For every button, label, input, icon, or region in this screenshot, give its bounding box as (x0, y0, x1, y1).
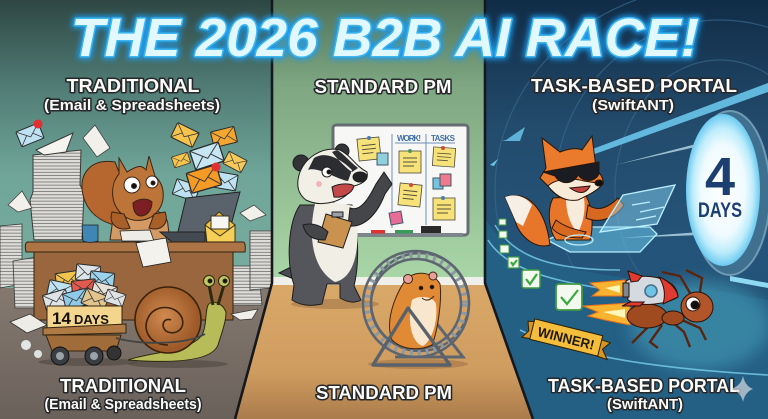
portal with day count (686, 111, 768, 275)
title: THE 2026 B2B AI RACE! (71, 8, 699, 68)
badger body (289, 205, 361, 305)
badger eyes (322, 167, 332, 177)
snail shell (135, 287, 201, 353)
badger head (298, 149, 367, 204)
whiteboard column headings: WORK! (397, 134, 421, 143)
badger arm pointing (348, 172, 392, 226)
heading: task-based portal top: (SwiftANT) (592, 97, 674, 114)
whiteboard column headings (397, 134, 456, 143)
badger tail (279, 265, 296, 280)
icon: sparkle (731, 376, 753, 402)
fox body (549, 196, 592, 240)
snail eye stalks (204, 276, 230, 305)
heading: traditional top: (Email & Spreadsheets) (44, 97, 220, 114)
heading: traditional bottom: TRADITIONAL (60, 376, 186, 396)
squirrel eyes (124, 176, 158, 193)
hamster wheel stand (373, 308, 450, 365)
paper stacks: background (0, 224, 272, 308)
icon: envelope cart (21, 264, 138, 366)
icon: stray paper on floor (10, 314, 47, 333)
icon: paper stack on desk (30, 133, 84, 240)
fox head (540, 136, 603, 200)
ant head (681, 292, 713, 322)
whiteboard (333, 125, 468, 237)
desk (25, 242, 245, 320)
icon: blue mug (82, 225, 98, 242)
ant with rocket (622, 270, 713, 348)
portal with day count: DAYS (698, 199, 742, 222)
badger belly (312, 200, 358, 282)
wall: standard PM (272, 0, 485, 278)
hologram laptop (565, 185, 675, 245)
icon: envelopes (16, 120, 247, 201)
fox (505, 136, 624, 246)
wall: traditional (0, 0, 272, 419)
floor: traditional (0, 288, 272, 419)
cart box with day count: 14 (52, 309, 71, 328)
heading: traditional bottom (44, 376, 202, 413)
sticky notes (357, 136, 456, 225)
heading: traditional top (44, 76, 220, 114)
heading: traditional top: TRADITIONAL (66, 76, 200, 96)
squirrel mouth (133, 199, 152, 216)
heading: task-based portal bottom: (SwiftANT) (607, 396, 683, 413)
light beams (490, 83, 768, 288)
heading: task-based portal top (531, 76, 737, 114)
squirrel head (113, 156, 163, 220)
marker tray (371, 226, 441, 234)
snail body (128, 302, 226, 361)
snail harness rope (116, 334, 205, 343)
badger face stripes (308, 150, 358, 181)
panel: task-based portal (485, 0, 768, 419)
banner: winner (522, 317, 612, 360)
heading: task-based portal bottom (548, 376, 740, 413)
squirrel tail (82, 161, 130, 226)
heading: standard PM top: STANDARD PM (314, 77, 452, 97)
speed track lines (488, 225, 768, 375)
heading: task-based portal top: TASK-BASED PORTAL (531, 76, 737, 96)
laptop (160, 192, 240, 242)
portal with day count: 4 (705, 147, 735, 207)
tunnel rings (495, 0, 768, 395)
fox tail (505, 195, 550, 246)
ant thorax (662, 311, 684, 325)
hologram platform (547, 227, 657, 252)
ant abdomen (627, 304, 667, 328)
checklist trail (499, 219, 582, 310)
clipboard (318, 212, 352, 248)
hamster wheel back (363, 251, 469, 369)
badger (279, 144, 392, 309)
heading: standard PM bottom: STANDARD PM (316, 383, 452, 403)
baseboard (272, 277, 485, 286)
banner: winner: WINNER! (536, 324, 596, 353)
whiteboard column headings: TASKS (431, 134, 456, 143)
cart box with day count: DAYS (74, 312, 109, 327)
cart box with day count (47, 306, 122, 330)
icon: stray paper by snail (231, 309, 258, 320)
desk items (82, 225, 171, 267)
floor: standard PM (235, 285, 533, 419)
panel: traditional (0, 0, 272, 419)
fox sunglasses (543, 162, 599, 183)
icon: open yellow envelope (205, 212, 235, 243)
snail (116, 276, 230, 368)
panel dividers (235, 0, 533, 419)
hamster (390, 272, 441, 349)
rocket (626, 276, 678, 304)
panel: standard PM (235, 0, 533, 419)
squirrel (82, 156, 170, 240)
floor: speed track (485, 218, 768, 419)
squirrel body (110, 208, 170, 240)
fox arms (552, 198, 624, 238)
floor highlight (630, 280, 768, 370)
heading: task-based portal bottom: TASK-BASED PORTAL (548, 376, 740, 396)
icon: flying papers (8, 125, 266, 221)
heading: traditional bottom: (Email & Spreadsheets) (44, 396, 202, 413)
squirrel hands (111, 212, 166, 229)
rocket flames (583, 280, 630, 325)
ant legs and antennae (632, 270, 706, 348)
badger ears (293, 155, 309, 171)
title: THE 2026 B2B AI RACE! (71, 8, 699, 68)
background: tunnel (485, 0, 768, 419)
